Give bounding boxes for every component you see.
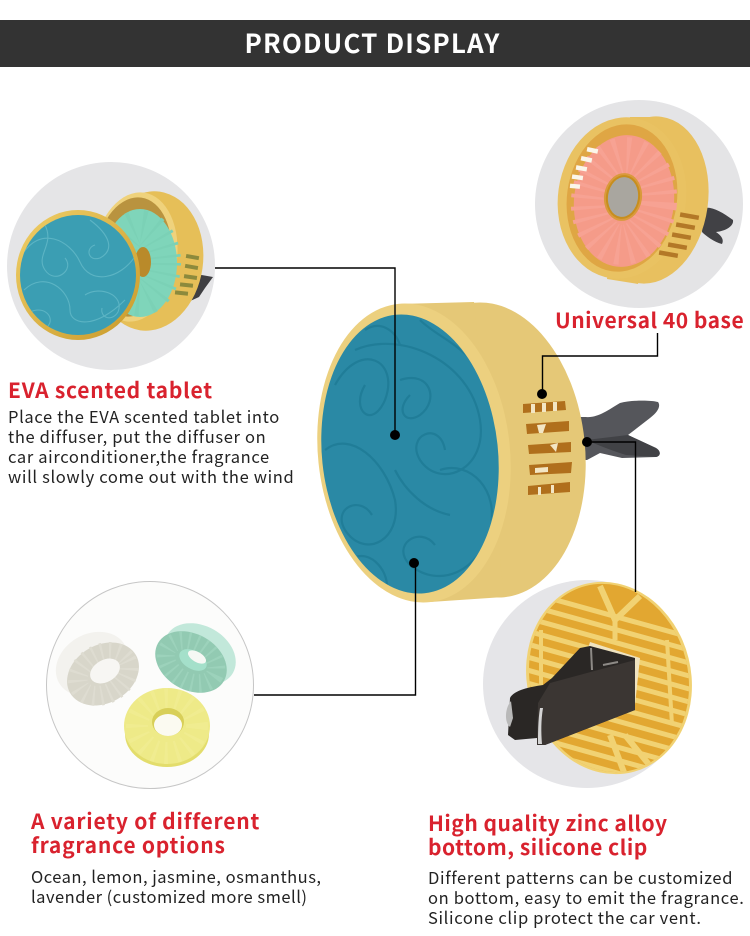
- text block: EVA scented tablet: EVA scented tablet: [8, 375, 213, 405]
- text block: zinc alloy bottom: Different patterns can be customized: [428, 865, 733, 889]
- main product: car vent diffuser: [303, 293, 660, 612]
- green tablet: [144, 611, 247, 705]
- lid: [16, 210, 140, 340]
- text block: zinc alloy bottom: High quality zinc alloy: [428, 808, 668, 838]
- green tablet: [115, 209, 177, 317]
- diffuser shell: [378, 293, 600, 607]
- text block: EVA scented tablet: [8, 375, 294, 488]
- metal rivet: [506, 701, 513, 727]
- header banner: PRODUCT DISPLAY: [244, 24, 501, 61]
- front ring: [558, 117, 630, 278]
- clip behind: [702, 208, 733, 244]
- photo circle: fragrance tablets: [44, 582, 254, 788]
- white tablet: [44, 619, 150, 718]
- text block: zinc alloy bottom: bottom, silicone clip: [428, 832, 648, 862]
- text block: EVA scented tablet: car airconditioner,the fragrance: [8, 444, 270, 468]
- metal plate: [575, 642, 640, 705]
- text block: fragrance options: fragrance options: [31, 830, 226, 860]
- hub: [604, 173, 642, 221]
- yellow tablet: [124, 688, 210, 767]
- text block: fragrance options: lavender (customized more smell): [31, 884, 308, 908]
- embossed swirl pattern: [325, 320, 492, 600]
- text block: fragrance options: A variety of different: [30, 806, 260, 836]
- text block: EVA scented tablet: will slowly come out with the wind: [8, 464, 294, 488]
- label: Universal 40 base: Universal 40 base: [555, 305, 744, 335]
- text block: zinc alloy bottom: Silicone clip protect the car vent.: [428, 905, 702, 929]
- black clip: [508, 646, 635, 745]
- text block: EVA scented tablet: the diffuser, put the diffuser on: [8, 424, 266, 448]
- text block: fragrance options: Ocean, lemon, jasmine, osmanthus,: [31, 864, 322, 888]
- scented pad face: [308, 306, 512, 602]
- vent clip: [578, 401, 660, 460]
- text block: zinc alloy bottom: on bottom, easy to emit the fragrance.: [428, 885, 745, 909]
- pink tablet: [574, 135, 674, 267]
- diffuser body: [120, 191, 204, 331]
- outer body: [638, 116, 709, 284]
- photo circle: universal 40 base: [535, 100, 743, 308]
- text block: zinc alloy bottom: [428, 808, 745, 929]
- text block: fragrance options: [30, 806, 322, 908]
- photo circle: silicone clip and zinc alloy bottom: [483, 580, 692, 788]
- header banner: [0, 20, 750, 67]
- photo circle: open diffuser with EVA tablet: [7, 162, 215, 370]
- vent slots: [175, 254, 199, 296]
- text block: EVA scented tablet: Place the EVA scented tablet into: [8, 404, 280, 428]
- outer vent slots: [659, 212, 699, 258]
- vent slots: [523, 401, 572, 495]
- leader line: EVA scented tablet: [215, 268, 400, 440]
- inner white slots: [570, 147, 598, 189]
- leader line: fragrance options: [254, 558, 419, 695]
- gold patterned disc: [506, 564, 712, 792]
- leader line: silicone clip: [582, 437, 636, 592]
- leader line: universal base: [537, 333, 658, 399]
